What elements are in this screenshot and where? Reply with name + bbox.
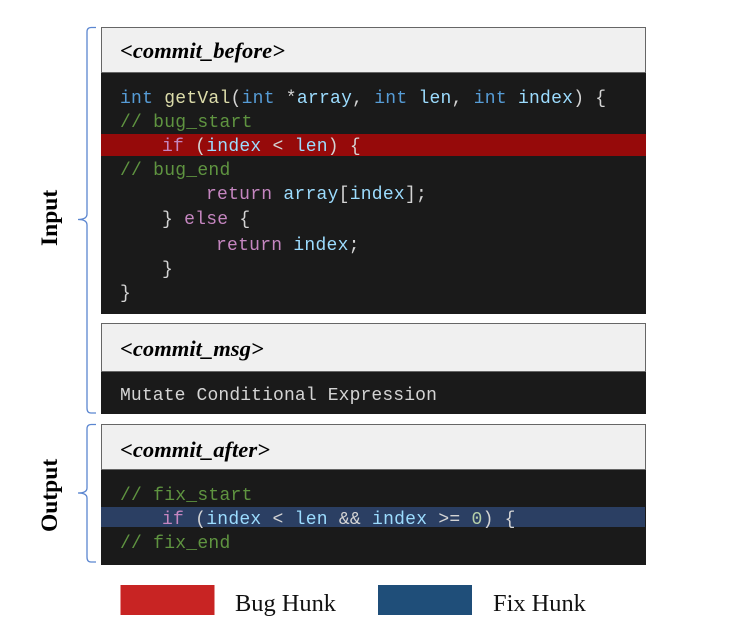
code block: commit_before: // bug_start xyxy=(120,113,253,133)
legend: fix hunk: Fix Hunk xyxy=(493,590,587,617)
legend: fix hunk xyxy=(378,585,587,617)
panel: commit_before xyxy=(101,28,646,314)
panel header: commit_msg: <commit_msg> xyxy=(120,336,264,361)
code block: commit_before: // bug_end xyxy=(120,161,231,181)
panel header: commit_before: <commit_before> xyxy=(120,38,285,63)
code block: commit_before: if (index < len) { xyxy=(162,137,361,157)
panel: commit_msg xyxy=(101,324,646,414)
panel header: commit_msg xyxy=(102,324,646,372)
code block: commit_after xyxy=(101,470,646,565)
message text xyxy=(101,372,646,414)
code block: commit_after: if (index < len && index >= 0) { xyxy=(162,510,516,530)
code block: commit_before: return index; xyxy=(216,236,360,256)
code block: commit_before: } else { xyxy=(162,210,250,230)
label: Output: Output xyxy=(37,459,63,532)
code block: commit_before: } xyxy=(162,260,173,280)
legend: bug hunk: Bug Hunk xyxy=(235,590,337,617)
label: Input: Input xyxy=(37,190,63,246)
panel header: commit_before xyxy=(102,28,646,72)
panel header: commit_after xyxy=(102,424,646,470)
input bracket xyxy=(78,28,96,413)
code block: commit_after: // fix_end xyxy=(120,534,231,554)
code block: commit_before: int getVal(int *array, int len, int index) { xyxy=(120,89,606,109)
code block: commit_after: // fix_start xyxy=(120,486,253,506)
panel: commit_after xyxy=(101,424,646,565)
output bracket xyxy=(78,424,96,562)
bug hunk highlight xyxy=(101,134,646,156)
code block: commit_before: } xyxy=(120,284,131,304)
message text: Mutate Conditional Expression xyxy=(120,386,437,406)
legend: bug hunk xyxy=(120,585,337,617)
panel header: commit_after: <commit_after> xyxy=(120,437,270,462)
code block: commit_before xyxy=(101,73,646,314)
code block: commit_before: return array[index]; xyxy=(206,185,427,205)
fix hunk highlight xyxy=(101,507,645,527)
